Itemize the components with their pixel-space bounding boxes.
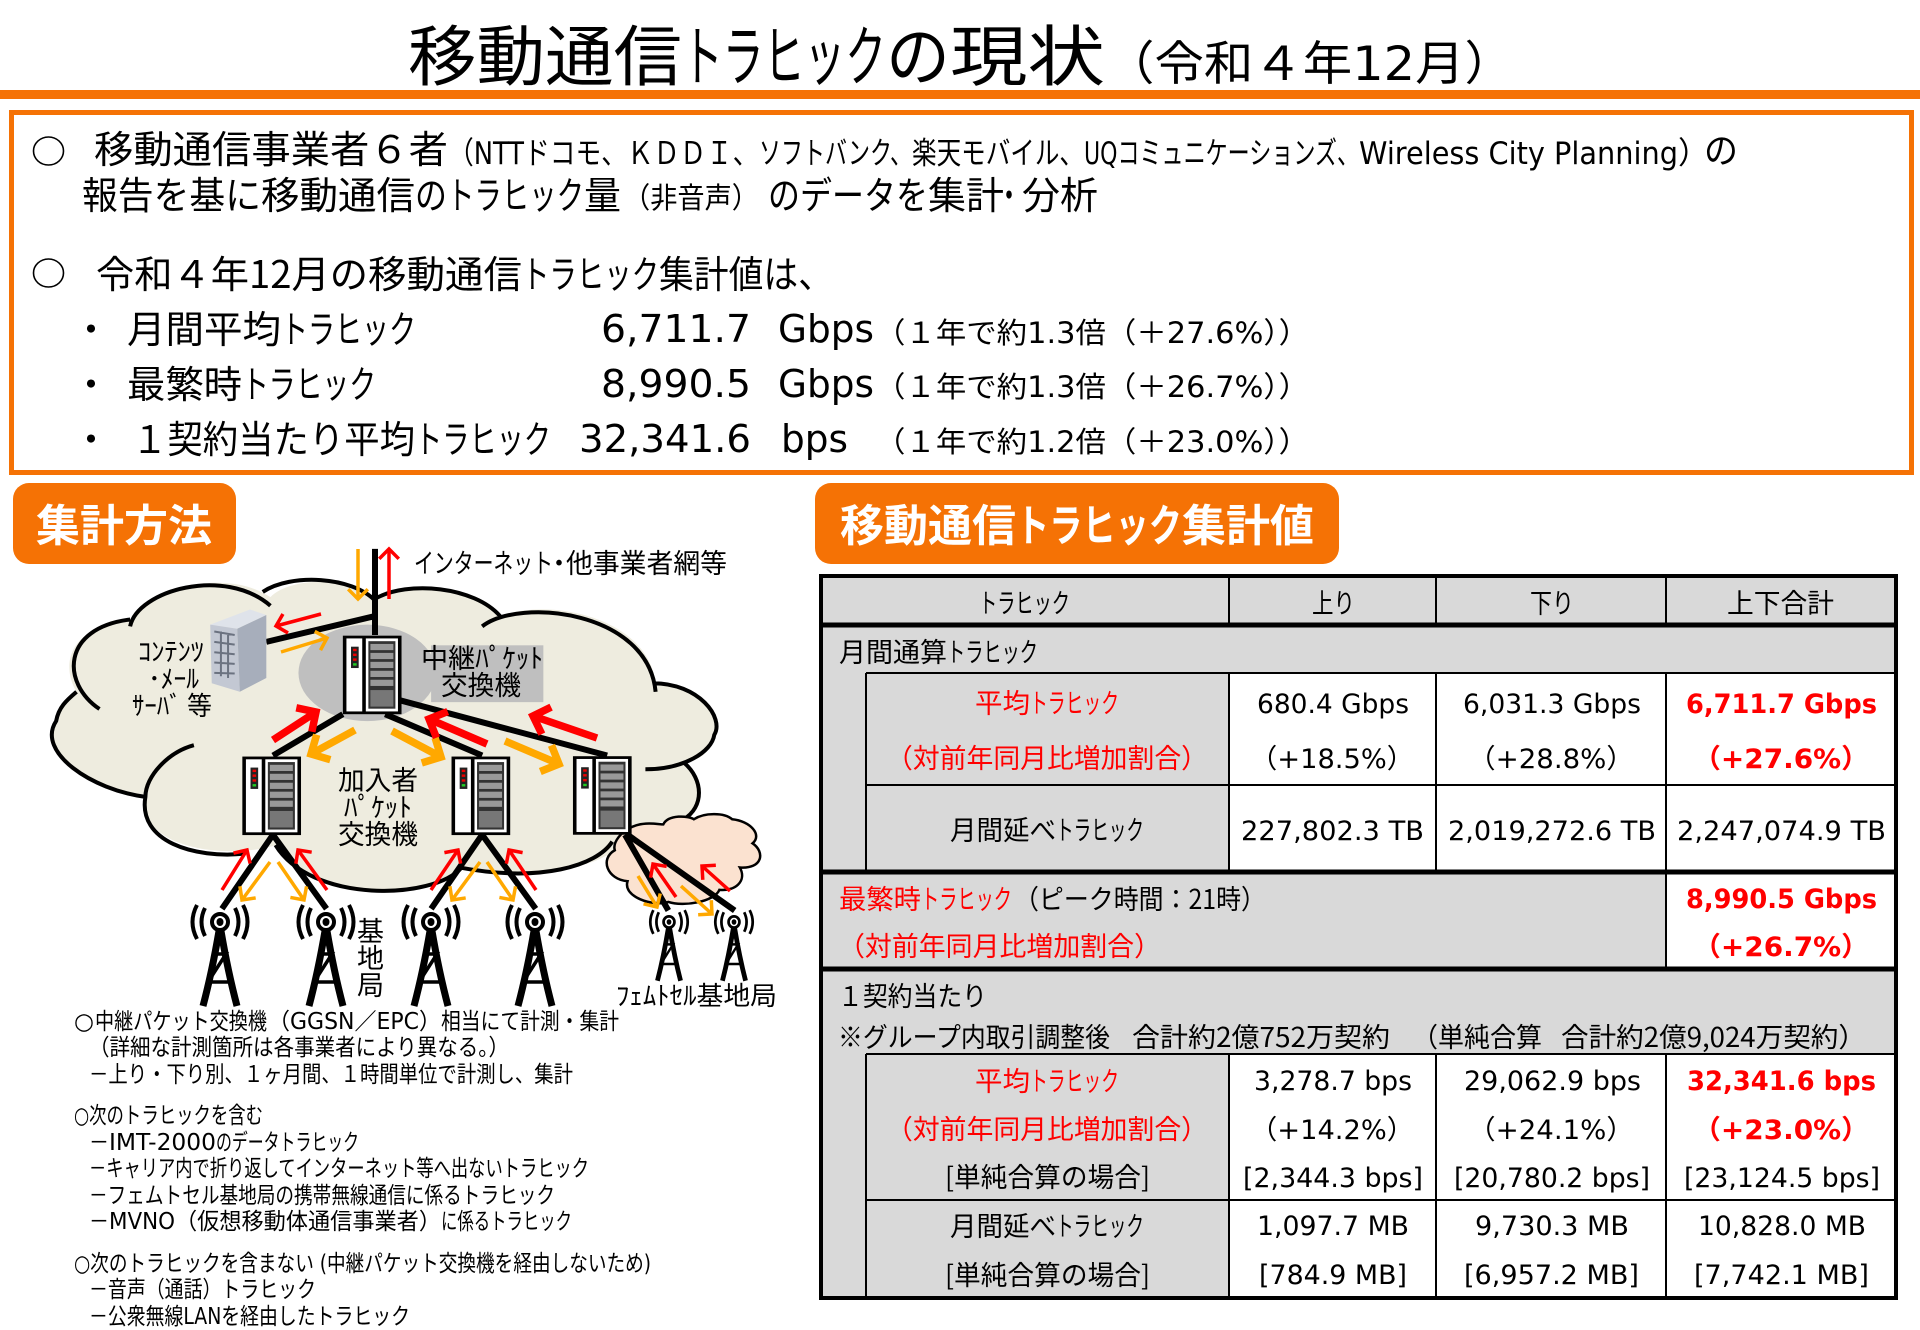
table header: 下り bbox=[1530, 582, 1574, 621]
text block: method notes: － bbox=[89, 1130, 109, 1156]
text: monthly average traffic: ・ bbox=[72, 299, 110, 354]
section: per contract: 3,278.7 bps bbox=[1254, 1066, 1412, 1097]
label: base station: 地 bbox=[357, 937, 384, 976]
panel: summary bbox=[12, 112, 1912, 472]
icon: subscriber switch 2 bbox=[452, 757, 510, 835]
label: content servers: ｻｰﾊﾞ 等 bbox=[132, 686, 212, 723]
text: source line 1: ＫＤＤＩ、 bbox=[627, 136, 759, 172]
text: total heading: 移動通信 bbox=[368, 244, 522, 299]
section: per contract: 9,730.3 MB bbox=[1475, 1211, 1629, 1242]
text: source line 1: ソフトバンク、 bbox=[759, 136, 912, 172]
section: per contract: １契約当たり bbox=[838, 975, 987, 1014]
text block: method notes: MVNO bbox=[109, 1209, 175, 1235]
network diagram bbox=[52, 542, 777, 1013]
text block: method notes: － bbox=[89, 1209, 109, 1235]
section: monthly totals: トラヒック bbox=[1056, 809, 1144, 848]
section: monthly totals: 月間通算 bbox=[839, 631, 947, 670]
title: （令和４年12月） bbox=[1105, 37, 1514, 92]
section: peak traffic bbox=[838, 878, 1877, 964]
text: monthly average traffic: （１年で約1.3倍（＋27.6%）） bbox=[875, 316, 1309, 350]
icon: subscriber switch 1 bbox=[242, 757, 301, 835]
title: 移動通信 bbox=[408, 4, 682, 100]
text: total heading bbox=[34, 244, 833, 299]
icon: femtocell station 1 bbox=[650, 910, 688, 981]
text block: method notes: ○次のトラヒックを含む bbox=[74, 1103, 263, 1129]
text: peak traffic: Gbps bbox=[778, 362, 874, 406]
text: source line 1: Wireless City Planning bbox=[1359, 136, 1678, 172]
section: per contract: 合計約2億752万契約 bbox=[1132, 1016, 1390, 1055]
label: internet: ・ bbox=[546, 542, 572, 581]
section: peak traffic: （対前年同月比増加割合） bbox=[838, 925, 1161, 964]
icon: subscriber switch 3 bbox=[573, 756, 632, 835]
text: source line 2: 分析 bbox=[1022, 165, 1098, 220]
text: total heading: 集計値は、 bbox=[659, 244, 833, 299]
section: per contract: （+23.0%） bbox=[1693, 1115, 1869, 1146]
section: monthly totals: 平均 bbox=[975, 682, 1030, 721]
icon: main cloud bbox=[52, 580, 717, 891]
text: traffic per contract: 32,341.6 bbox=[579, 417, 751, 461]
text: source line 2: 移動通信 bbox=[261, 165, 415, 220]
text: source line 2: 報告を基に bbox=[82, 165, 261, 220]
section: per contract: [6,957.2 MB] bbox=[1464, 1260, 1639, 1291]
text block: method notes: （GGSN／EPC） bbox=[268, 1009, 441, 1035]
section: per contract: [単純合算の場合] bbox=[945, 1254, 1150, 1293]
network links bbox=[222, 549, 735, 910]
label: subscriber switch: ﾊﾟｹｯﾄ bbox=[344, 786, 412, 825]
text: monthly average traffic: Gbps bbox=[778, 307, 874, 351]
section: per contract: [単純合算の場合] bbox=[945, 1156, 1150, 1195]
section: monthly totals: 227,802.3 TB bbox=[1241, 816, 1424, 847]
icon: base station 4 bbox=[508, 905, 562, 1006]
text block: method notes: －フェムトセル基地局の携帯無線通信に係るトラヒック bbox=[89, 1183, 555, 1209]
title: の bbox=[886, 4, 950, 100]
text block: method notes: （仮想移動体通信事業者） bbox=[175, 1209, 441, 1235]
table: traffic values bbox=[821, 576, 1896, 1298]
section: per contract: （対前年同月比増加割合） bbox=[886, 1108, 1208, 1147]
icon: femtocell cloud bbox=[607, 814, 760, 904]
section: per contract: トラヒック bbox=[1030, 1060, 1119, 1099]
section: per contract: 平均 bbox=[975, 1060, 1030, 1099]
label: subscriber switch: 加入者 bbox=[338, 759, 418, 798]
label: subscriber switch bbox=[338, 759, 418, 852]
section: monthly totals: 月間延べ bbox=[950, 809, 1056, 848]
text block: method notes: ○ bbox=[74, 1009, 94, 1035]
section: per contract: 1,097.7 MB bbox=[1257, 1211, 1409, 1242]
section: per contract: [784.9 MB] bbox=[1259, 1260, 1407, 1291]
text: source line 1: ） bbox=[1678, 136, 1709, 172]
label: femtocell: ﾌｪﾑﾄｾﾙ基地局 bbox=[616, 976, 777, 1013]
text: monthly average traffic: 6,711.7 bbox=[601, 307, 751, 351]
clouds and equipment bbox=[52, 549, 760, 910]
section: monthly totals: （+18.5%） bbox=[1250, 744, 1414, 775]
text block: method notes: IMT-2000 bbox=[109, 1130, 216, 1156]
orange downlink arrows bbox=[242, 549, 712, 914]
section: monthly totals: （+27.6%） bbox=[1693, 744, 1869, 775]
text: peak traffic: （１年で約1.3倍（＋26.7%）） bbox=[875, 370, 1309, 404]
table header: トラヒック bbox=[979, 582, 1070, 621]
text: source line 2: ・ bbox=[996, 165, 1022, 220]
section: per contract: [20,780.2 bps] bbox=[1454, 1163, 1650, 1194]
text: traffic per contract: トラヒック bbox=[415, 409, 551, 464]
heading: values badge: 集計値 bbox=[1182, 490, 1314, 554]
label: content servers: ･ﾒｰﾙ bbox=[148, 659, 199, 696]
section: monthly totals: 680.4 Gbps bbox=[1257, 689, 1409, 720]
label: relay switch: 中継ﾊﾟｹｯﾄ bbox=[421, 637, 543, 676]
title: トラヒック bbox=[682, 4, 886, 100]
text block: method notes: （詳細な計測箇所は各事業者により異なる。） bbox=[89, 1035, 509, 1061]
text block: method notes: －キャリア内で折り返してインターネット等へ出ないトラヒック bbox=[89, 1156, 589, 1182]
text: peak traffic: 最繁時 bbox=[127, 354, 242, 409]
section: per contract: 合計約2億9,024万契約） bbox=[1561, 1016, 1866, 1055]
text: peak traffic: ・ bbox=[72, 354, 110, 409]
label: relay switch bbox=[421, 637, 543, 703]
text: total heading: トラヒック bbox=[522, 244, 659, 299]
text: traffic per contract bbox=[72, 409, 1309, 464]
section: per contract: 32,341.6 bps bbox=[1687, 1066, 1876, 1097]
red uplink arrows bbox=[222, 549, 730, 897]
section: peak traffic: 最繁時 bbox=[839, 878, 921, 917]
text block: method notes: －上り・下り別、１ヶ月間、１時間単位で計測し、集計 bbox=[89, 1062, 573, 1088]
heading: values badge: トラヒック bbox=[1016, 490, 1182, 554]
title: 現状 bbox=[950, 4, 1105, 100]
icon: base station 1 bbox=[192, 905, 248, 1006]
text block: method notes: 相当にて計測・集計 bbox=[441, 1009, 619, 1035]
icon: base station 3 bbox=[404, 905, 458, 1006]
text: peak traffic: トラヒック bbox=[242, 354, 376, 409]
text: source line 2 bbox=[82, 165, 1098, 220]
text: source line 2: 量 bbox=[584, 165, 621, 220]
text: source line 2: （非音声） bbox=[623, 175, 759, 217]
table header: 上下合計 bbox=[1727, 582, 1834, 621]
section: monthly totals: 6,711.7 Gbps bbox=[1686, 689, 1877, 720]
section: per contract: 29,062.9 bps bbox=[1464, 1066, 1641, 1097]
section: monthly totals: トラヒック bbox=[947, 631, 1038, 670]
text block: method notes: －音声（通話）トラヒック bbox=[89, 1277, 316, 1303]
section: per contract: ※グループ内取引調整後 bbox=[838, 1016, 1110, 1055]
section: peak traffic: 8,990.5 Gbps bbox=[1686, 884, 1877, 915]
text: source line 1: の bbox=[1704, 122, 1738, 174]
section: per contract: 月間延べ bbox=[950, 1205, 1056, 1244]
section: monthly totals: 2,247,074.9 TB bbox=[1677, 816, 1886, 847]
section: per contract: [23,124.5 bps] bbox=[1684, 1163, 1880, 1194]
text: source line 2: の bbox=[415, 165, 447, 220]
heading: method badge bbox=[13, 483, 236, 564]
section: peak traffic: トラヒック bbox=[921, 878, 1012, 917]
text: traffic per contract: １契約当たり平均 bbox=[132, 409, 415, 464]
text: source line 1: 移動通信事業者６者 bbox=[94, 119, 448, 174]
text: monthly average traffic bbox=[72, 299, 1309, 354]
icon: femtocell station 2 bbox=[715, 910, 753, 981]
section: per contract: [2,344.3 bps] bbox=[1243, 1163, 1423, 1194]
text block: method notes: のデータトラヒック bbox=[216, 1130, 359, 1156]
text block: method notes: 中継パケット交換機 bbox=[95, 1009, 267, 1035]
section: peak traffic: （+26.7%） bbox=[1693, 932, 1869, 963]
table header: 上り bbox=[1312, 582, 1355, 621]
section: per contract: 10,828.0 MB bbox=[1698, 1211, 1866, 1242]
label: internet: 他事業者網等 bbox=[566, 542, 727, 581]
text block: method notes: －公衆無線LANを経由したトラヒック bbox=[89, 1304, 410, 1330]
heading: values badge: 移動通信 bbox=[840, 490, 1016, 554]
text: source line 1 bbox=[34, 119, 1738, 174]
label: internet bbox=[414, 542, 727, 581]
section: monthly totals: 2,019,272.6 TB bbox=[1448, 816, 1656, 847]
section: per contract: トラヒック bbox=[1056, 1205, 1144, 1244]
icon: base station 2 bbox=[298, 905, 354, 1006]
text: source line 2: トラヒック bbox=[447, 165, 584, 220]
section: per contract: [7,742.1 MB] bbox=[1694, 1260, 1869, 1291]
section: per contract: （+24.1%） bbox=[1468, 1115, 1634, 1146]
icon: content server bbox=[210, 609, 266, 692]
text: source line 2: 集計 bbox=[928, 165, 1004, 220]
heading: values badge bbox=[815, 483, 1339, 564]
label: relay switch: 交換機 bbox=[441, 664, 521, 703]
section: monthly totals: 6,031.3 Gbps bbox=[1463, 689, 1641, 720]
section: monthly totals: （対前年同月比増加割合） bbox=[886, 737, 1208, 776]
text: traffic per contract: bps bbox=[781, 417, 848, 461]
label: internet: インターネット bbox=[414, 542, 553, 581]
text block: method notes: に係るトラヒック bbox=[441, 1209, 572, 1235]
text: source line 2: のデータを bbox=[768, 165, 928, 220]
section: peak traffic: （ピーク時間：21時） bbox=[1014, 878, 1266, 917]
text: source line 1: （NTTドコモ、 bbox=[448, 136, 627, 172]
section: per contract bbox=[838, 975, 1880, 1293]
text block: method notes: ○次のトラヒックを含まない (中継パケット交換機を経由しないため) bbox=[74, 1251, 651, 1277]
heading: method badge: 集計方法 bbox=[36, 490, 212, 554]
table header bbox=[979, 582, 1834, 621]
label: base station bbox=[357, 910, 384, 1003]
text: source line 1: 楽天モバイル、 bbox=[912, 136, 1084, 172]
section: monthly totals: （+28.8%） bbox=[1468, 744, 1634, 775]
label: base station: 局 bbox=[357, 964, 384, 1003]
section: monthly totals: トラヒック bbox=[1030, 682, 1119, 721]
section: per contract: （+14.2%） bbox=[1250, 1115, 1414, 1146]
text: total heading: 令和４年12月の bbox=[96, 244, 368, 299]
text: monthly average traffic: トラヒック bbox=[281, 299, 416, 354]
text: source line 1: UQコミュニケーションズ、 bbox=[1084, 136, 1359, 172]
text: peak traffic: 8,990.5 bbox=[601, 362, 751, 406]
label: content servers bbox=[132, 632, 212, 723]
title bbox=[408, 4, 1514, 100]
label: base station: 基 bbox=[357, 910, 384, 949]
text block: method notes bbox=[74, 1009, 651, 1330]
section: monthly totals bbox=[839, 631, 1886, 848]
icon: relay packet switch bbox=[343, 636, 402, 714]
label: subscriber switch: 交換機 bbox=[338, 813, 418, 852]
label: content servers: ｺﾝﾃﾝﾂ bbox=[138, 632, 204, 669]
section: per contract: （単純合算 bbox=[1412, 1016, 1542, 1055]
text: traffic per contract: ・ bbox=[72, 409, 110, 464]
text: peak traffic bbox=[72, 354, 1309, 409]
relay area bbox=[298, 625, 436, 721]
text: traffic per contract: （１年で約1.2倍（＋23.0%）） bbox=[875, 425, 1309, 459]
text: monthly average traffic: 月間平均 bbox=[127, 299, 281, 354]
